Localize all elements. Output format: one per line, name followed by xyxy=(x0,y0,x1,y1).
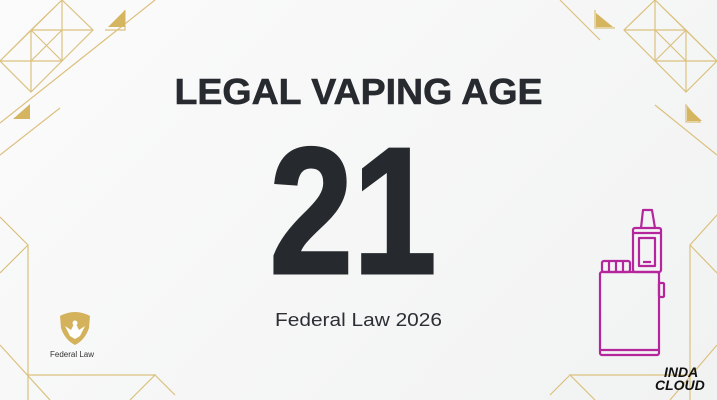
icon: shield logo xyxy=(60,312,90,345)
brand logo: CLOUD xyxy=(655,377,705,393)
subtitle: Federal Law 2026 xyxy=(275,310,442,330)
big number: 21 xyxy=(270,111,436,312)
icon: vape xyxy=(600,210,664,355)
brand logo xyxy=(655,364,705,393)
title: LEGAL VAPING AGE xyxy=(174,71,542,112)
logo label: Federal Law xyxy=(50,350,94,359)
brand logo: INDA xyxy=(664,364,698,380)
